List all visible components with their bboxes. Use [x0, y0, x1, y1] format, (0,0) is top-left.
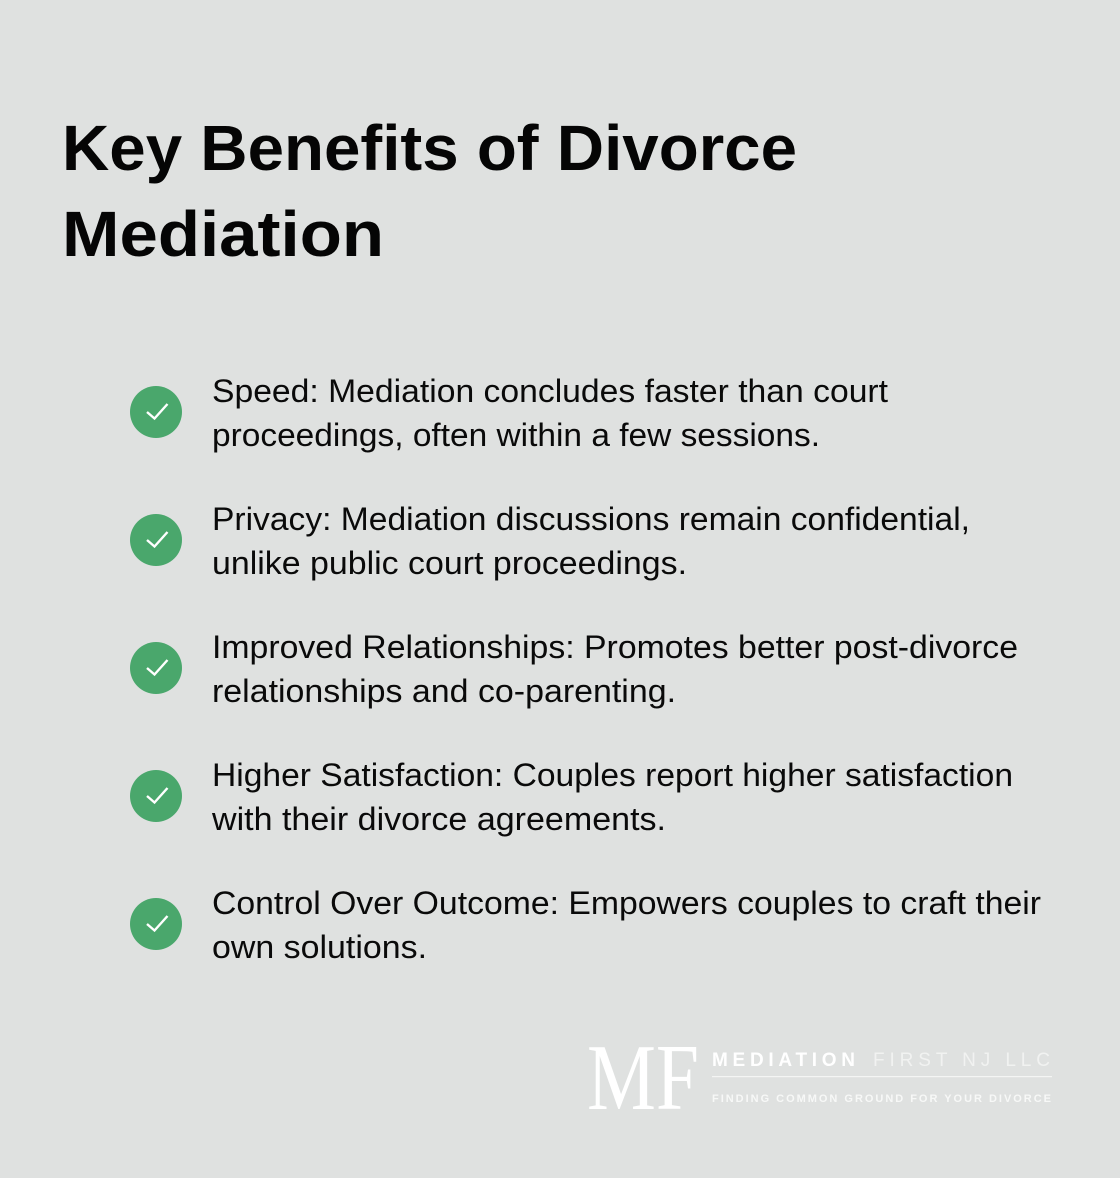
text: relationships — [212, 629, 1018, 709]
text: control: Control Over Outcome: Empowers couples to craft their — [212, 885, 1041, 921]
text: satisfaction — [211, 757, 1013, 837]
logo name — [712, 1050, 1050, 1071]
icon: check control — [130, 898, 182, 950]
logo name: MEDIATION — [712, 1050, 855, 1071]
benefit: privacy — [130, 501, 970, 581]
text: privacy: unlike public court proceedings. — [212, 545, 687, 581]
text: speed — [212, 373, 888, 453]
text: satisfaction: Higher Satisfaction: Couples report higher satisfaction — [212, 757, 1013, 793]
icon: check speed — [130, 386, 182, 438]
benefit list — [130, 373, 1041, 965]
text: control: own solutions. — [212, 929, 427, 965]
benefit: control over outcome — [130, 885, 1041, 965]
title: Key Benefits of Divorce — [62, 112, 797, 184]
text: satisfaction: with their divorce agreements. — [211, 801, 666, 837]
logo monogram: MF — [587, 1026, 699, 1130]
logo tagline: FINDING COMMON GROUND FOR YOUR DIVORCE — [712, 1093, 1051, 1105]
benefit: improved relationships — [130, 629, 1018, 709]
text: control — [212, 885, 1041, 965]
icon: check privacy — [130, 514, 182, 566]
text: speed: Speed: Mediation concludes faster than court — [212, 373, 888, 409]
text: speed: proceedings, often within a few sessions. — [212, 417, 820, 453]
text: privacy — [212, 501, 970, 581]
icon: check relationships — [130, 642, 182, 694]
text: privacy: Privacy: Mediation discussions remain confidential, — [212, 501, 970, 537]
text: relationships: relationships and co-parenting. — [212, 673, 676, 709]
title — [62, 112, 797, 270]
title: Mediation — [62, 198, 384, 270]
benefit: speed — [130, 373, 888, 453]
icon: check satisfaction — [130, 770, 182, 822]
logo: Mediation First NJ LLC — [587, 1026, 1052, 1130]
benefit: higher satisfaction — [130, 757, 1013, 837]
text: relationships: Improved Relationships: Promotes better post-divorce — [212, 629, 1018, 665]
logo name: FIRST NJ LLC — [873, 1050, 1050, 1071]
